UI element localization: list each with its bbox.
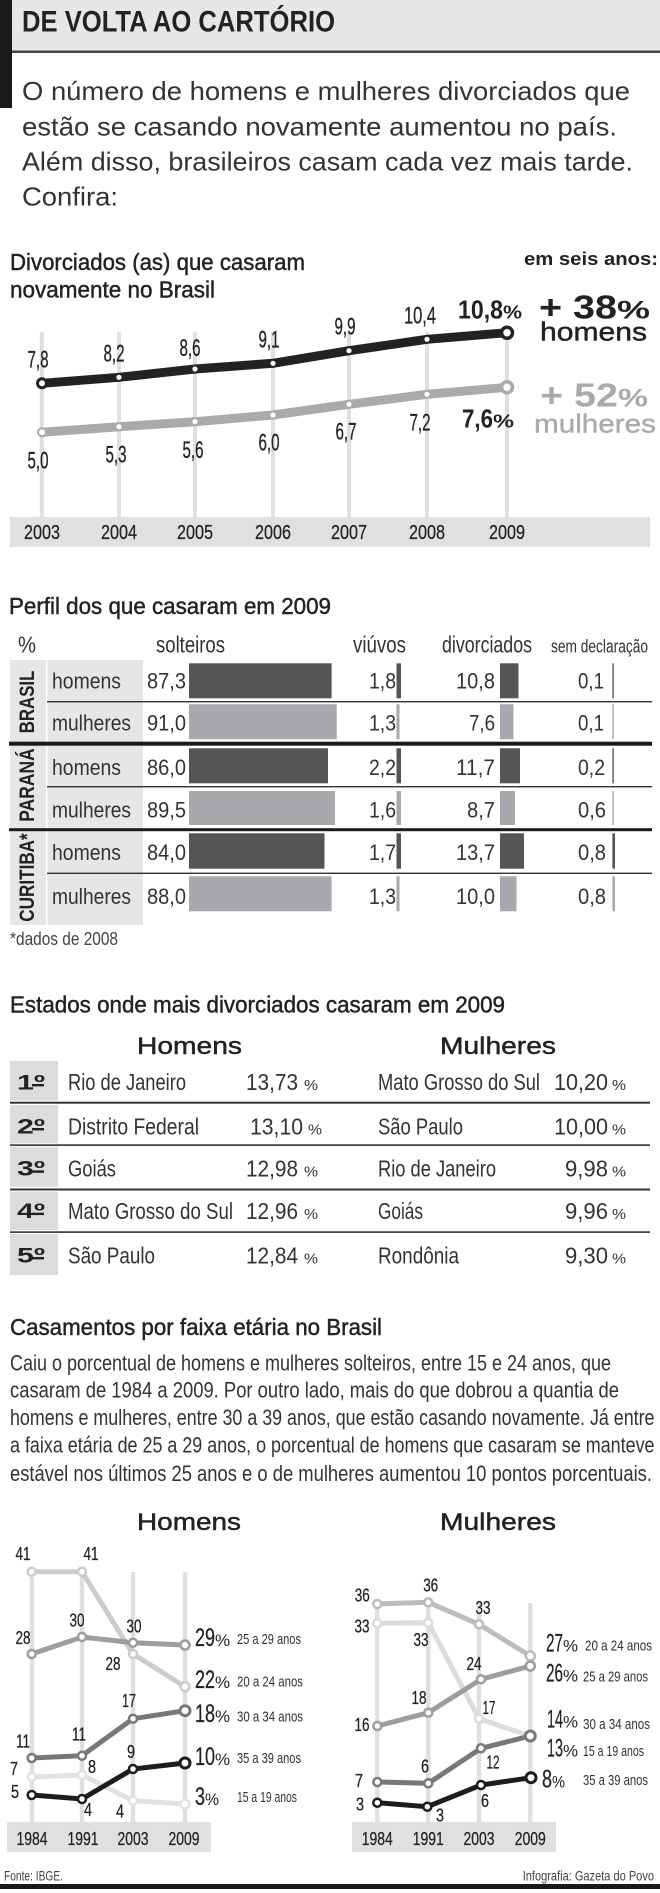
ranks: 5º — [17, 1244, 45, 1267]
data labels: 41 — [84, 1544, 98, 1564]
values: mulheres — [28, 403, 514, 474]
end labels: 13 — [547, 1735, 563, 1763]
values: solteiros: 91,0 — [147, 711, 186, 736]
heading: Divorciados (as) que casaram — [10, 249, 305, 275]
values: viuvos: 2,2 — [369, 755, 396, 780]
region labels: CURITIBA* — [16, 833, 39, 922]
bottom rule — [0, 1884, 660, 1889]
list: homens: Distrito Federal — [68, 1113, 199, 1139]
list: mulheres: % — [612, 1250, 626, 1267]
values: homens: 9,9 — [334, 313, 356, 340]
heading: Perfil dos que casaram em 2009 — [9, 593, 331, 619]
source credit: Fonte: IBGE. — [4, 1868, 63, 1884]
data labels: 28 — [106, 1654, 120, 1674]
data labels: 28 — [16, 1628, 30, 1648]
axis: 1991 — [68, 1829, 98, 1849]
data labels: 36 — [355, 1586, 370, 1606]
end labels: % — [205, 1790, 219, 1809]
end labels: % — [215, 1673, 230, 1692]
values: sem declaracao: 0,8 — [578, 884, 606, 909]
callout: em seis anos: homens — [540, 317, 647, 347]
series: 25 a 29 anos — [373, 1662, 535, 1730]
end labels: 26 — [546, 1660, 563, 1688]
footnote: *dados de 2008 — [10, 929, 118, 949]
data labels: 41 — [16, 1544, 30, 1564]
list: mulheres: % — [612, 1164, 626, 1181]
end labels: 29 — [195, 1624, 215, 1652]
ranks — [17, 1071, 45, 1267]
chart: mulheres — [352, 1509, 652, 1852]
series: 35 a 39 anos — [28, 1758, 190, 1803]
end labels: 18 — [195, 1700, 215, 1728]
callout: em seis anos: mulheres — [534, 409, 656, 439]
axis — [7, 1572, 211, 1852]
axis: 2003 — [118, 1829, 148, 1849]
end labels: % — [563, 1742, 578, 1761]
intro text: Além disso, brasileiros casam cada vez mais tarde. — [22, 147, 633, 177]
bars: solteiros — [189, 663, 337, 911]
list: homens: Rio de Janeiro — [68, 1069, 186, 1095]
end labels: 8 — [542, 1766, 552, 1794]
grid and year band — [10, 332, 650, 547]
title: DE VOLTA AO CARTÓRIO — [22, 5, 335, 39]
list: homens: 12,98 — [246, 1156, 298, 1182]
row labels: mulheres — [52, 884, 131, 909]
values: solteiros: 86,0 — [147, 755, 186, 780]
callout: em seis anos — [524, 249, 658, 439]
values: mulheres: % — [493, 411, 514, 431]
series: 30 a 34 anos — [373, 1731, 535, 1787]
heading: Estados onde mais divorciados casaram em 2009 — [10, 992, 505, 1018]
list: mulheres: Rondônia — [378, 1242, 459, 1268]
end labels: 3 — [195, 1783, 205, 1811]
chart: homens — [7, 1509, 303, 1852]
list: homens: 13,73 — [246, 1069, 298, 1095]
grid and year band: 2007 — [331, 522, 367, 544]
series: 35 a 39 anos — [373, 1773, 536, 1811]
intro text: estão se casando novamente aumentou no país. — [22, 112, 617, 142]
column headers — [18, 632, 648, 658]
row labels — [52, 668, 131, 909]
list: homens — [68, 1069, 322, 1268]
end labels: % — [552, 1773, 565, 1792]
end labels: 25 a 29 anos — [237, 1631, 301, 1648]
data labels: 9 — [127, 1742, 135, 1762]
intro text: Confira: — [22, 182, 118, 212]
axis: 1984 — [362, 1829, 393, 1849]
values: divorciados: 8,7 — [467, 797, 495, 822]
values: divorciados: 7,6 — [469, 711, 495, 736]
values: sem declaracao: 0,6 — [578, 797, 606, 822]
row lines — [10, 1102, 650, 1233]
callout: em seis anos: + 38 — [539, 288, 617, 325]
series: 30 a 34 anos — [28, 1706, 190, 1762]
end labels: % — [215, 1631, 230, 1650]
panel: divorciados line chart — [10, 249, 658, 547]
values: sem declaracao: 0,1 — [578, 668, 604, 693]
list: homens: 12,84 — [246, 1242, 298, 1268]
separators — [9, 701, 652, 874]
list: mulheres: Mato Grosso do Sul — [378, 1069, 540, 1095]
list: mulheres: São Paulo — [378, 1113, 463, 1139]
end labels: 27 — [546, 1630, 563, 1658]
bars: sem declaracao — [612, 663, 615, 911]
values: homens: 10,4 — [404, 302, 436, 329]
paragraph — [10, 1351, 654, 1486]
column headers: divorciados — [442, 632, 532, 658]
data labels: 3 — [356, 1795, 364, 1815]
data labels: 33 — [354, 1617, 370, 1637]
values: mulheres: 7,6 — [462, 403, 493, 433]
data labels: 7 — [355, 1771, 363, 1791]
data labels: 6 — [481, 1791, 489, 1811]
column headers: solteiros — [156, 632, 225, 658]
axis — [352, 1603, 556, 1852]
values: divorciados: 13,7 — [456, 840, 495, 865]
panel: perfil table — [9, 593, 652, 949]
ranks: 2º — [17, 1115, 45, 1138]
rank cells — [10, 1061, 58, 1275]
values: homens: 10,8 — [458, 294, 503, 324]
line: mulheres — [38, 382, 512, 436]
end labels: 14 — [547, 1706, 563, 1734]
data labels — [10, 1544, 142, 1822]
values: homens: 9,1 — [258, 326, 280, 353]
values: mulheres: 6,0 — [258, 430, 280, 457]
values: sem declaracao — [578, 668, 606, 909]
data labels: 18 — [412, 1688, 426, 1708]
values: mulheres: 5,3 — [106, 442, 126, 469]
row labels: homens — [52, 668, 121, 693]
data labels: 17 — [482, 1698, 496, 1718]
data labels: 6 — [421, 1757, 429, 1777]
header band — [0, 0, 660, 108]
bars: divorciados — [500, 663, 524, 911]
values: sem declaracao: 0,2 — [578, 755, 605, 780]
heading — [10, 249, 305, 302]
data labels: 17 — [122, 1691, 136, 1711]
data labels: 11 — [16, 1732, 30, 1752]
data labels: 24 — [466, 1654, 482, 1674]
ranks: 4º — [17, 1200, 45, 1223]
list: homens: Mato Grosso do Sul — [68, 1198, 233, 1224]
end labels: 20 a 24 anos — [237, 1674, 303, 1691]
values: solteiros: 87,3 — [147, 668, 186, 693]
values: mulheres: 5,6 — [182, 437, 204, 464]
bars: viuvos — [396, 663, 401, 911]
end labels: 35 a 39 anos — [237, 1750, 301, 1767]
list: mulheres: Goiás — [378, 1198, 423, 1224]
end labels: 22 — [195, 1666, 215, 1694]
values: viuvos: 1,6 — [369, 797, 396, 822]
chart title: Homens — [137, 1509, 241, 1536]
values: homens: 7,8 — [28, 346, 48, 373]
values: viuvos: 1,8 — [369, 668, 396, 693]
values: viuvos: 1,3 — [369, 711, 396, 736]
values: viuvos: 1,7 — [369, 840, 396, 865]
end labels: % — [563, 1713, 578, 1732]
callout: em seis anos: em seis anos: — [524, 249, 658, 269]
region labels: PARANÁ — [16, 748, 39, 822]
list: homens: 12,96 — [246, 1198, 298, 1224]
line: homens — [38, 327, 512, 388]
column titles — [137, 1033, 556, 1060]
values: divorciados — [456, 668, 495, 909]
list: homens: São Paulo — [68, 1242, 155, 1268]
series: 20 a 24 anos — [373, 1598, 535, 1660]
values: solteiros — [147, 668, 186, 909]
column titles: Mulheres — [440, 1033, 556, 1060]
region labels: BRASIL — [16, 670, 39, 733]
panel: casamentos por faixa etaria — [7, 1314, 654, 1852]
values: divorciados: 10,8 — [456, 668, 495, 693]
data labels: 16 — [354, 1715, 370, 1735]
grid and year band: 2006 — [255, 522, 291, 544]
axis: 1991 — [413, 1829, 444, 1849]
row background — [10, 660, 143, 925]
ranks: 3º — [17, 1158, 45, 1181]
values: viuvos: 1,3 — [369, 884, 396, 909]
region labels — [16, 670, 39, 922]
list: mulheres: 9,98 — [565, 1156, 608, 1182]
values: solteiros: 89,5 — [147, 797, 186, 822]
data labels — [354, 1576, 500, 1826]
values: homens: 8,2 — [104, 341, 124, 368]
list: mulheres: % — [612, 1206, 626, 1223]
list: homens: % — [304, 1164, 318, 1181]
ranks: 1º — [17, 1071, 45, 1094]
values: sem declaracao: 0,8 — [578, 840, 606, 865]
values: mulheres: 5,0 — [28, 447, 48, 474]
end labels: % — [563, 1637, 578, 1656]
intro text: O número de homens e mulheres divorciados que — [22, 76, 630, 106]
grid and year band: 2003 — [24, 522, 60, 544]
data labels: 33 — [414, 1630, 428, 1650]
series: 15 a 19 anos — [28, 1771, 190, 1808]
list: mulheres: % — [612, 1121, 626, 1138]
list: homens: Goiás — [68, 1156, 116, 1182]
grid and year band: 2005 — [177, 522, 213, 544]
chart title: Mulheres — [440, 1509, 556, 1536]
values: divorciados: 10,0 — [456, 884, 495, 909]
list: mulheres: 9,30 — [565, 1242, 608, 1268]
axis: 1984 — [16, 1829, 48, 1849]
values: homens: % — [503, 302, 522, 322]
data labels: 12 — [486, 1753, 500, 1773]
end labels: % — [215, 1750, 230, 1769]
data labels: 30 — [126, 1617, 142, 1637]
values: mulheres: 6,7 — [336, 418, 356, 445]
values: solteiros: 88,0 — [147, 884, 186, 909]
end labels: % — [563, 1667, 578, 1686]
heading: Casamentos por faixa etária no Brasil — [10, 1314, 382, 1340]
column titles: Homens — [137, 1033, 242, 1060]
data labels: 11 — [72, 1725, 86, 1745]
end labels: 10 — [195, 1743, 215, 1771]
data labels: 30 — [70, 1611, 84, 1631]
intro text — [22, 76, 633, 212]
grid and year band: 2008 — [409, 522, 445, 544]
row labels: homens — [52, 755, 121, 780]
end labels: 15 a 19 anos — [237, 1789, 297, 1806]
row labels: mulheres — [52, 797, 131, 822]
values: divorciados: 11,7 — [456, 755, 495, 780]
list: mulheres: 10,20 — [554, 1069, 608, 1095]
row labels: homens — [52, 840, 121, 865]
column headers: viúvos — [353, 632, 406, 658]
end labels: % — [215, 1707, 230, 1726]
grid and year band: 2009 — [489, 522, 525, 544]
list: homens: % — [304, 1206, 318, 1223]
heading: novamente no Brasil — [10, 276, 215, 302]
values: viuvos — [369, 668, 396, 909]
callout: em seis anos: % — [618, 385, 648, 413]
list: mulheres: Rio de Janeiro — [378, 1156, 496, 1182]
callout: em seis anos: + 52 — [540, 377, 618, 414]
callout: em seis anos: % — [617, 296, 650, 324]
data labels: 5 — [11, 1782, 19, 1802]
data labels: 3 — [436, 1806, 444, 1826]
axis: 2009 — [515, 1829, 546, 1849]
axis: 2003 — [464, 1829, 494, 1849]
list: homens: % — [304, 1077, 318, 1094]
end labels — [542, 1630, 652, 1794]
list: homens: % — [308, 1121, 322, 1138]
grid and year band: 2004 — [101, 522, 137, 544]
axis: 2009 — [168, 1829, 200, 1849]
data labels: 4 — [84, 1800, 92, 1820]
series: 25 a 29 anos — [28, 1633, 190, 1658]
values: homens: 8,6 — [180, 335, 200, 362]
values: solteiros: 84,0 — [147, 840, 186, 865]
values: mulheres: 7,2 — [410, 410, 430, 437]
list: homens: % — [304, 1250, 318, 1267]
data labels: 7 — [10, 1759, 18, 1779]
data labels: 8 — [88, 1757, 96, 1777]
row labels: mulheres — [52, 711, 131, 736]
values: sem declaracao: 0,1 — [578, 711, 604, 736]
data labels: 36 — [423, 1576, 438, 1596]
values: homens — [28, 294, 522, 373]
series: 20 a 24 anos — [28, 1568, 190, 1691]
panel: estados ranking — [10, 992, 650, 1275]
series: 15 a 19 anos — [373, 1619, 530, 1736]
list: mulheres — [378, 1069, 626, 1268]
data labels: 4 — [116, 1802, 124, 1822]
list: mulheres: % — [612, 1077, 626, 1094]
list: mulheres: 9,96 — [565, 1198, 608, 1224]
data labels: 33 — [476, 1598, 490, 1618]
list: homens: 13,10 — [250, 1113, 303, 1139]
end labels: 30 a 34 anos — [237, 1709, 303, 1726]
end labels — [195, 1624, 303, 1811]
column headers: % — [18, 632, 36, 658]
list: mulheres: 10,00 — [554, 1113, 608, 1139]
